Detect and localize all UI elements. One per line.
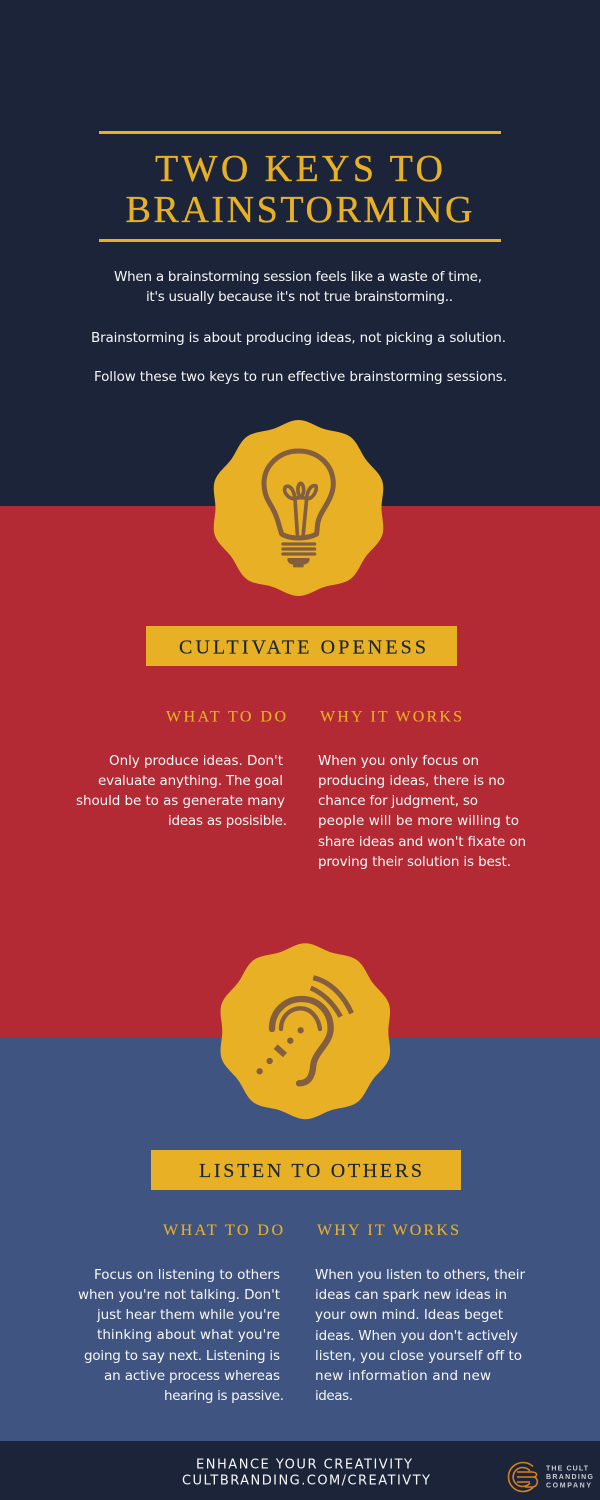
- logo: the cult branding company: COMPANY: [546, 1482, 591, 1490]
- text block: why it works, openess: When you only focus on: [318, 753, 479, 769]
- text block: why it works, listen: ideas can spark new ideas in: [315, 1287, 507, 1303]
- text block: why it works, listen: listen, you close yourself off to: [315, 1348, 522, 1364]
- logo: the cult branding company: BRANDING: [546, 1474, 594, 1481]
- panel: listen to others background: [0, 1037, 600, 1441]
- intro text: When a brainstorming session feels like a waste of time,: [114, 269, 482, 285]
- heading box: cultivate openess: [146, 626, 457, 666]
- text block: what to do, listen: [78, 1267, 284, 1404]
- text block: why it works, listen: ideas. When you don't actively: [315, 1328, 518, 1344]
- text block: what to do, openess: evaluate anything. The goal: [98, 773, 283, 789]
- text block: what to do, openess: ideas as posisible.: [168, 813, 287, 829]
- column heading: why it works: WHY IT WORKS: [320, 708, 462, 726]
- text block: why it works, openess: people will be more willing to: [318, 813, 519, 829]
- text block: why it works, listen: your own mind. Ideas beget: [315, 1307, 503, 1323]
- intro text: Brainstorming is about producing ideas, not picking a solution.: [91, 330, 506, 346]
- text block: why it works, openess: proving their solution is best.: [318, 854, 511, 870]
- text block: what to do, listen: going to say next. Listening is: [84, 1348, 280, 1364]
- text block: why it works, openess: chance for judgment, so: [318, 793, 478, 809]
- title: BRAINSTORMING: [126, 189, 472, 231]
- text block: why it works, listen: [315, 1267, 525, 1404]
- panel: cultivate openess background: [0, 506, 600, 1037]
- icon: light bulb badge: [214, 420, 383, 596]
- text block: what to do, listen: an active process whereas: [104, 1368, 280, 1384]
- footer call to action: CULTBRANDING.COM/CREATIVTY: [182, 1474, 430, 1488]
- footer call to action: [182, 1458, 430, 1488]
- text block: what to do, listen: when you're not talking. Don't: [78, 1287, 280, 1303]
- column heading: why it works: WHY IT WORKS: [317, 1222, 459, 1239]
- column heading: what to do: WHAT TO DO: [166, 708, 286, 726]
- icon: ear badge: [221, 943, 390, 1119]
- heading box: cultivate openess: CULTIVATE OPENESS: [179, 636, 426, 658]
- intro text: Follow these two keys to run effective brainstorming sessions.: [94, 369, 507, 385]
- intro text: it's usually because it's not true brainstorming..: [146, 289, 453, 305]
- text block: why it works, listen: new information and new: [315, 1368, 491, 1384]
- heading box: listen to others: [151, 1150, 461, 1190]
- panel: footer background: [0, 1441, 600, 1500]
- text block: why it works, openess: [318, 753, 526, 870]
- title: TWO KEYS TO: [155, 148, 443, 190]
- text block: what to do, listen: Focus on listening to others: [94, 1267, 280, 1283]
- heading box: listen to others: LISTEN TO OTHERS: [199, 1160, 422, 1182]
- panel: header background: [0, 0, 600, 506]
- intro text: [91, 269, 507, 385]
- text block: what to do, openess: Only produce ideas. Don't: [109, 753, 283, 769]
- title: [99, 131, 501, 242]
- text block: why it works, openess: share ideas and won't fixate on: [318, 834, 526, 850]
- text block: what to do, openess: should be to as generate many: [76, 793, 285, 809]
- logo: the cult branding company: [509, 1462, 594, 1492]
- column heading: what to do: WHAT TO DO: [163, 1222, 283, 1239]
- text block: why it works, listen: ideas.: [315, 1388, 353, 1404]
- text block: what to do, openess: [76, 753, 287, 829]
- text block: why it works, openess: producing ideas, there is no: [318, 773, 505, 789]
- text block: what to do, listen: just hear them while you're: [96, 1307, 280, 1323]
- logo: the cult branding company: THE CULT: [546, 1466, 589, 1472]
- text block: why it works, listen: When you listen to others, their: [315, 1267, 525, 1283]
- text block: what to do, listen: thinking about what you're: [97, 1327, 280, 1343]
- text block: what to do, listen: hearing is passive.: [164, 1388, 284, 1404]
- footer call to action: ENHANCE YOUR CREATIVITY: [196, 1458, 412, 1472]
